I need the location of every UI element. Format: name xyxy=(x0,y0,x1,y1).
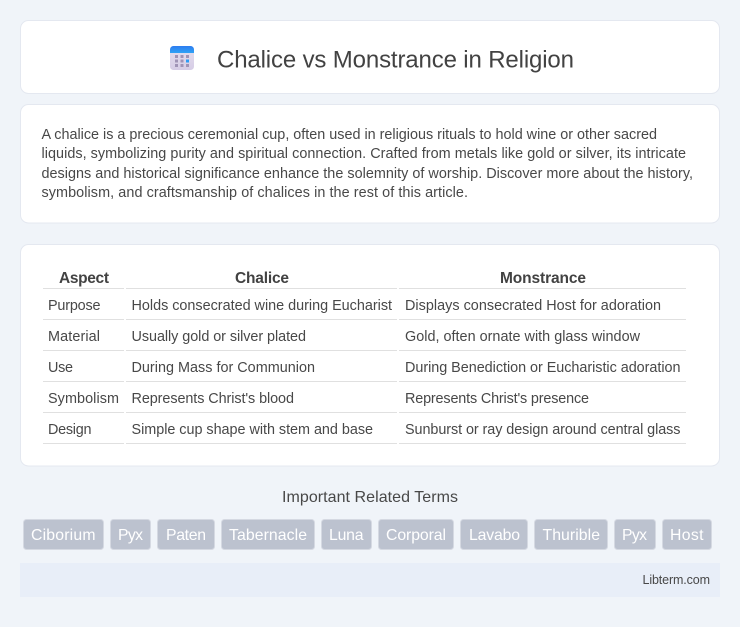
tags: related terms: Pyx xyxy=(118,527,143,544)
tags: related terms: Ciborium xyxy=(31,527,96,544)
row: material: Gold, often ornate with glass window xyxy=(405,329,641,345)
row: use: Use xyxy=(48,360,73,376)
row: symbolism xyxy=(48,391,589,407)
footer source: Libterm.com xyxy=(642,573,710,587)
panel: header xyxy=(20,20,720,94)
row: purpose: Displays consecrated Host for adoration xyxy=(405,298,661,314)
row: use: During Benediction or Eucharistic adoration xyxy=(405,360,680,376)
table header row: Monstrance xyxy=(500,270,586,287)
table rules xyxy=(43,288,686,444)
row: use: During Mass for Communion xyxy=(132,360,315,376)
row: material: Usually gold or silver plated xyxy=(132,329,306,345)
footer xyxy=(20,563,720,597)
tags: related terms: Lavabo xyxy=(469,527,520,544)
table header row: Chalice xyxy=(235,270,289,287)
tags: related terms: Pyx xyxy=(622,527,647,544)
related terms heading: Important Related Terms xyxy=(282,489,458,506)
tags: related terms: Thurible xyxy=(542,527,600,544)
row: use xyxy=(48,360,680,376)
tags: related terms xyxy=(24,520,712,550)
row: symbolism: Represents Christ's presence xyxy=(405,391,589,407)
row: design xyxy=(48,422,680,438)
table header row: Aspect xyxy=(59,270,109,287)
row: design: Sunburst or ray design around central glass xyxy=(405,422,680,438)
row: design: Simple cup shape with stem and base xyxy=(132,422,373,438)
description text: A chalice is a precious ceremonial cup, often used in religious rituals to hold wine or other sacred xyxy=(42,127,657,143)
tags: related terms: Paten xyxy=(166,527,206,544)
tags: related terms: Luna xyxy=(329,527,364,544)
row: purpose: Purpose xyxy=(48,298,100,314)
tags: related terms: Host xyxy=(670,527,704,544)
title: Chalice vs Monstrance in Religion xyxy=(217,46,574,74)
description text: designs and historical significance enhance the solemnity of worship. Discover more about the history, xyxy=(42,166,693,182)
tags: related terms: Corporal xyxy=(386,527,446,544)
description text: symbolism, and craftsmanship of chalices in the rest of this article. xyxy=(42,185,468,201)
row: purpose xyxy=(48,298,661,314)
row: material: Material xyxy=(48,329,100,345)
icon: calendar xyxy=(170,46,194,70)
row: symbolism: Represents Christ's blood xyxy=(132,391,294,407)
row: symbolism: Symbolism xyxy=(48,391,119,407)
row: purpose: Holds consecrated wine during Eucharist xyxy=(132,298,392,314)
row: material xyxy=(48,329,641,345)
table header row xyxy=(59,270,586,287)
panel: description xyxy=(20,104,720,223)
row: design: Design xyxy=(48,422,92,438)
description text xyxy=(42,127,693,201)
panel: comparison table xyxy=(20,244,720,466)
description text: liquids, symbolizing purity and spiritual connection. Crafted from metals like gold or silver, its intricate xyxy=(42,146,686,162)
tags: related terms: Tabernacle xyxy=(229,527,307,544)
